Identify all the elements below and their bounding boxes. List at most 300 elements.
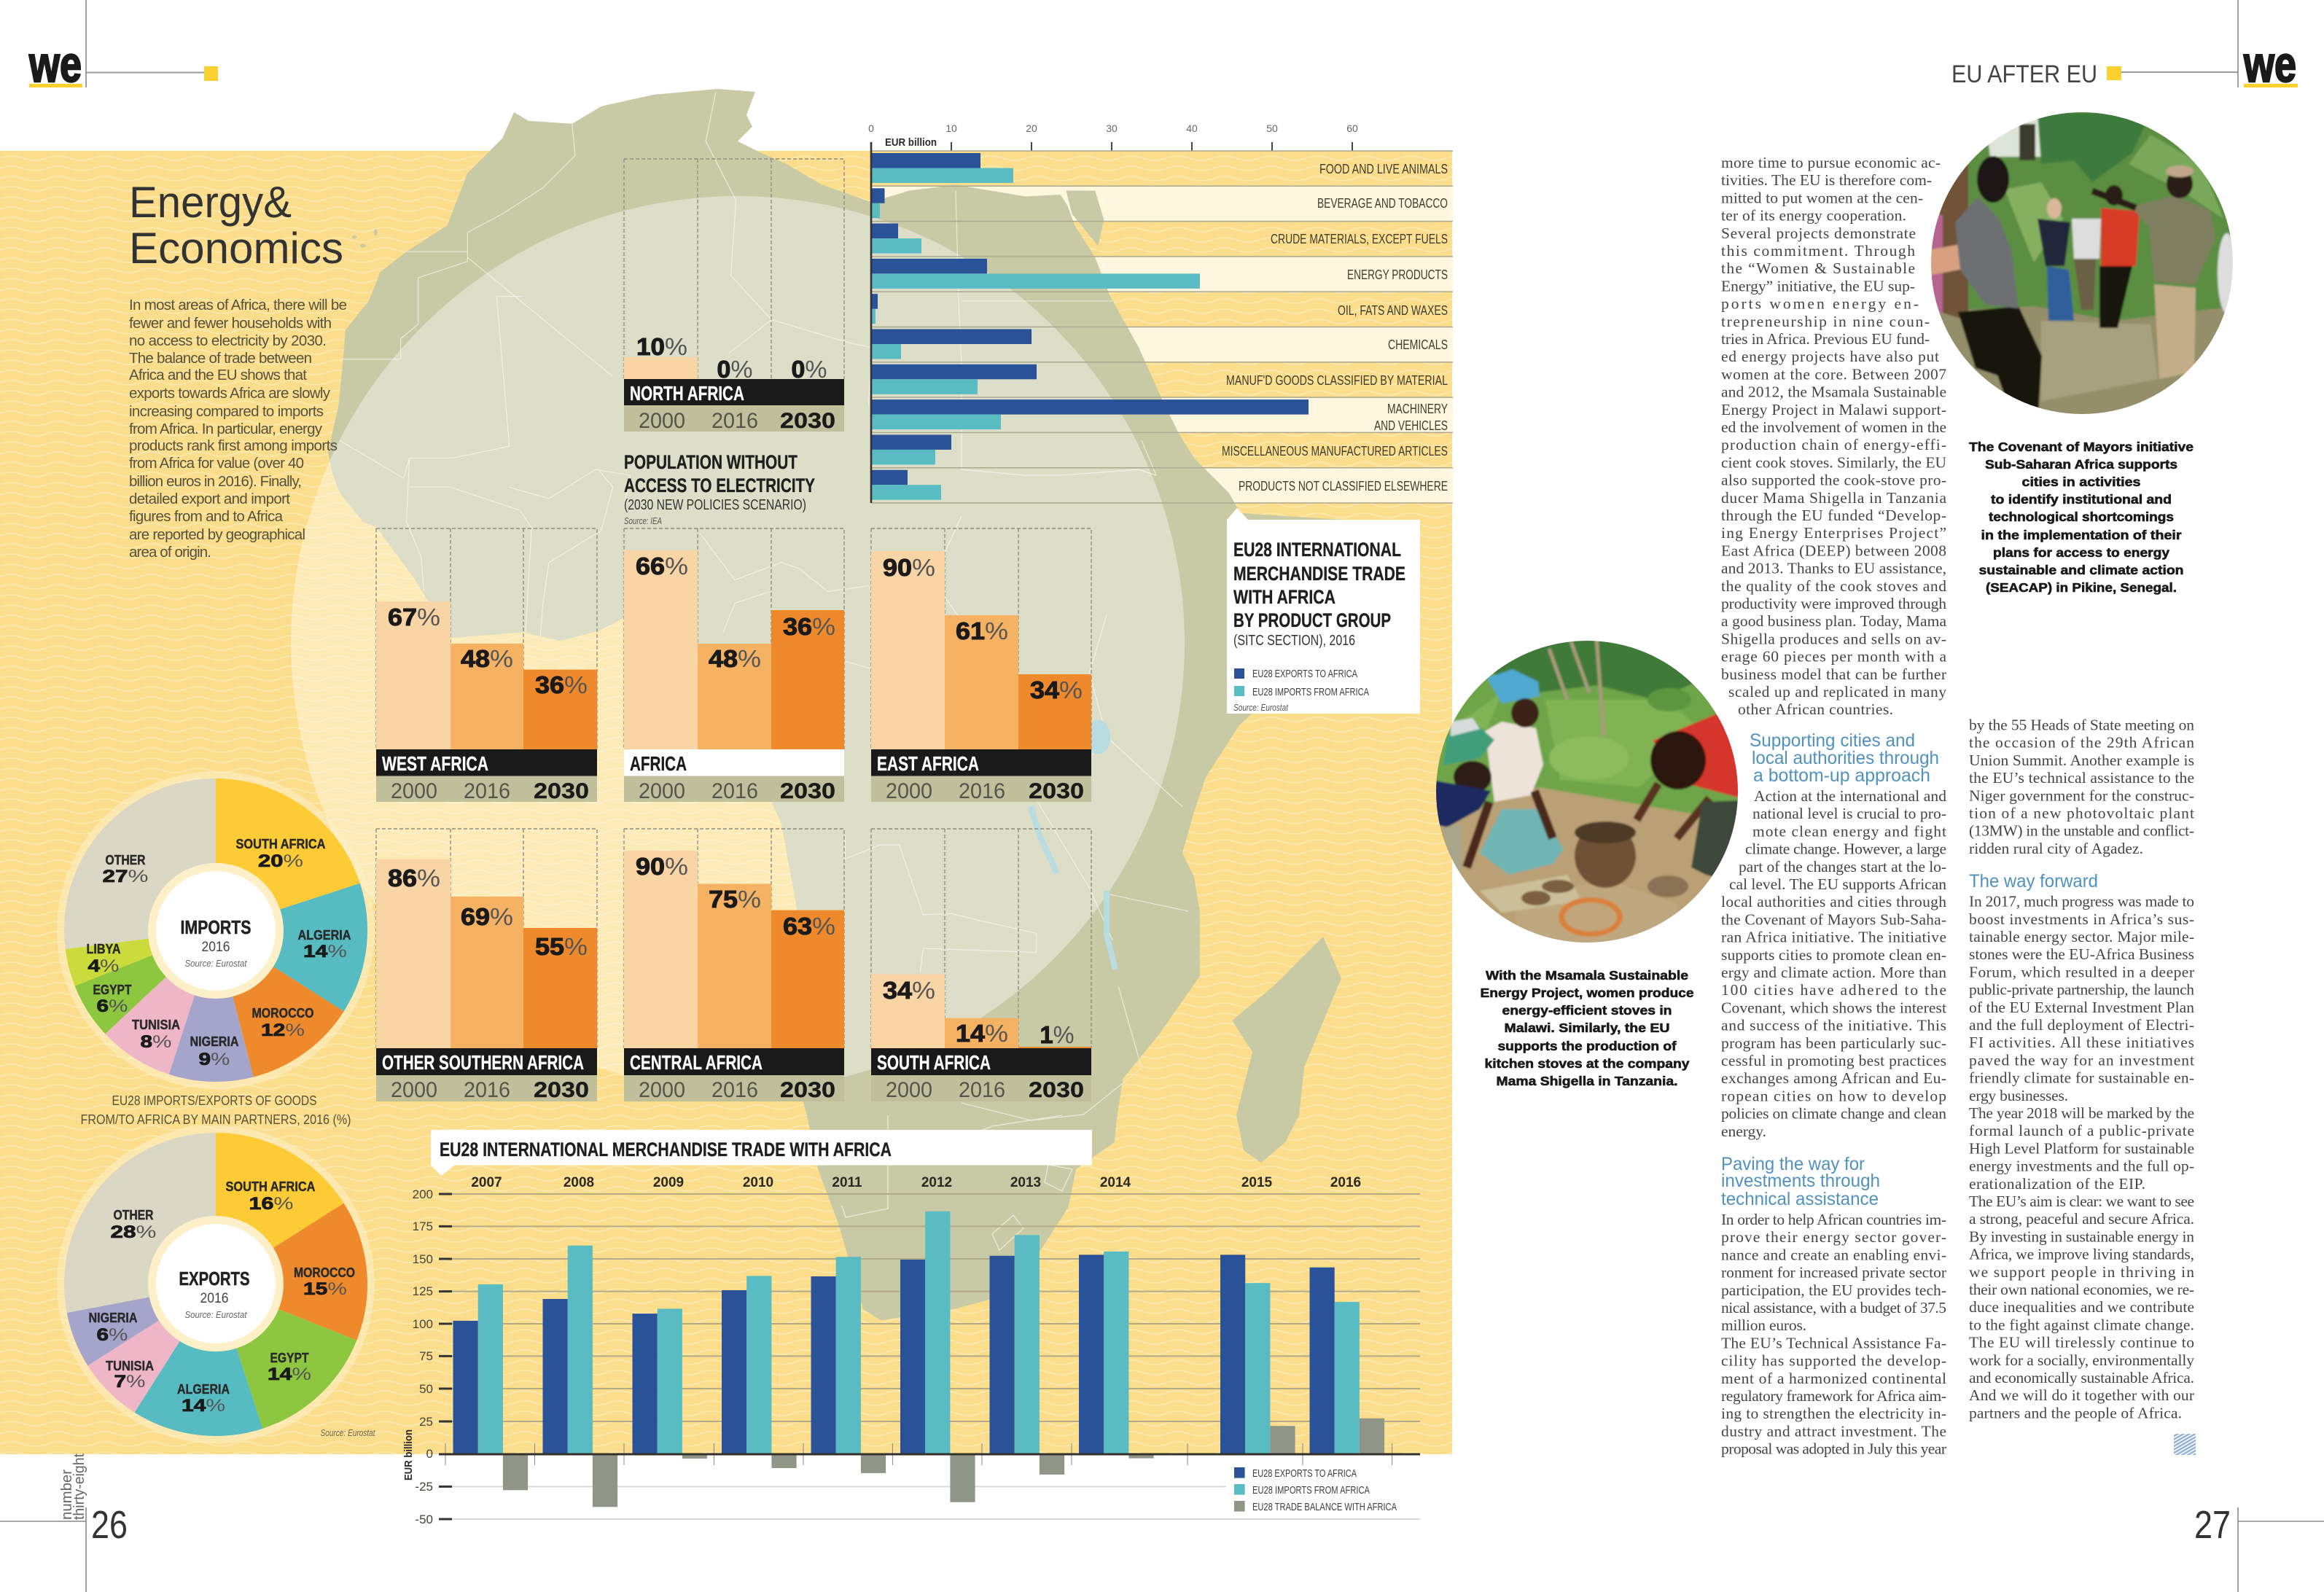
- chart: trade by product group: FOOD AND LIVE ANIMALS: [1319, 162, 1448, 176]
- panel: west africa: [376, 528, 597, 803]
- chart: trade by product group: BEVERAGE AND TOBACCO: [1317, 196, 1448, 211]
- title: Energy&: [129, 178, 292, 227]
- article text: supporting cities: cal level. The EU supports African: [1729, 875, 1946, 893]
- caption: Covenant of Mayors: cities in activities: [2022, 475, 2141, 489]
- panel: other southern africa: 55%: [535, 933, 588, 960]
- article text: right column top: by the 55 Heads of State meeting on: [1969, 716, 2194, 733]
- chart: trade by year: [402, 1175, 1420, 1526]
- article text: opening column: this commitment. Through: [1721, 242, 1915, 260]
- article text: supporting cities: exchanges among African and Eu-: [1721, 1069, 1946, 1087]
- article text: opening column: a good business plan. Today, Mama: [1721, 612, 1946, 630]
- article text: supporting cities: climate change. However, a large: [1745, 840, 1946, 858]
- callout: trade by product group title and legend: EU28 INTERNATIONAL: [1233, 539, 1401, 561]
- panel: south africa: 2016: [959, 1078, 1005, 1102]
- panel: central africa: 90%: [636, 853, 688, 880]
- article text: the way forward: paved the way for an investment: [1969, 1051, 2194, 1069]
- article text: the way forward: their own national economies, we re-: [1969, 1281, 2194, 1298]
- panel: east africa: 90%: [883, 554, 935, 581]
- subheading: paving the way: [1721, 1154, 1880, 1209]
- callout: trade by product group title and legend: BY PRODUCT GROUP: [1233, 609, 1391, 631]
- panel: north africa: 2030: [780, 409, 835, 433]
- article text: opening column: and 2013. Thanks to EU assistance,: [1721, 560, 1946, 577]
- article text: the way forward: By investing in sustainable energy in: [1969, 1228, 2194, 1245]
- intro text: In most areas of Africa, there will be: [129, 297, 347, 313]
- pie chart: imports: 9%: [198, 1050, 230, 1069]
- intro text: no access to electricity by 2030.: [129, 332, 327, 349]
- panel: africa: 36%: [783, 613, 835, 640]
- article text: opening column: ed the involvement of women in the: [1721, 418, 1946, 436]
- footer left: page number 26: 26: [91, 1503, 128, 1547]
- chart: trade by year: 2008: [564, 1175, 594, 1190]
- chart: trade by year: 150: [413, 1252, 433, 1266]
- callout: trade by product group title and legend: MERCHANDISE TRADE: [1233, 563, 1405, 585]
- article text: right column top: Union Summit. Another example is: [1969, 752, 2194, 769]
- article text: right column top: the EU’s technical assistance to the: [1969, 769, 2194, 787]
- panel: central africa: 2030: [780, 1078, 835, 1102]
- article text: the way forward: and economically sustainable Africa.: [1969, 1369, 2194, 1386]
- article text: supporting cities: Covenant, which shows the interest: [1721, 999, 1946, 1016]
- pie chart: exports: ALGERIA: [177, 1382, 230, 1397]
- article text: opening column: tries in Africa. Previous EU fund-: [1721, 330, 1930, 348]
- intro text: Africa and the EU shows that: [129, 367, 307, 383]
- panel: west africa: 2016: [464, 779, 510, 803]
- heading: population without access to electricity: Source: IEA: [624, 515, 662, 526]
- article text: opening column: scaled up and replicated in many: [1728, 683, 1946, 701]
- pie chart: exports: OTHER: [114, 1208, 154, 1222]
- pie chart: exports: 16 %: [249, 1194, 293, 1214]
- photo: women making stoves: [1432, 638, 1744, 948]
- article text: opening column: business model that can be further: [1721, 666, 1946, 683]
- light circle overlay: [291, 196, 1185, 1090]
- panel: north africa: 2016: [711, 409, 758, 433]
- article text: the way forward: The year 2018 will be marked by the: [1969, 1104, 2194, 1122]
- chart: trade by product group: 10: [945, 122, 957, 134]
- panel: south africa: SOUTH AFRICA: [877, 1051, 991, 1074]
- footer left: page number 26: [0, 1454, 128, 1592]
- article text: supporting cities: part of the changes start at the lo-: [1739, 858, 1946, 875]
- chart: trade by product group: EUR billion: [885, 136, 937, 149]
- lakes: [1031, 720, 1115, 969]
- article text: opening column: East Africa (DEEP) between 2008: [1721, 542, 1946, 559]
- article text: opening column: Several projects demonstrate: [1721, 225, 1916, 242]
- article text: opening column: cient cook stoves. Similarly, the EU: [1721, 453, 1946, 471]
- heading: population without access to electricity: [624, 451, 815, 526]
- chart: trade by year: 2012: [921, 1175, 952, 1190]
- article text: the way forward: erationalization of the EIP.: [1969, 1175, 2145, 1193]
- pie chart: imports: IMPORTS: [181, 916, 251, 938]
- pie chart: exports: 15 %: [303, 1279, 347, 1299]
- caption: Covenant of Mayors: technological shortcomings: [1989, 510, 2174, 524]
- panel: south africa: 34%: [883, 977, 935, 1004]
- caption: Covenant of Mayors: The Covenant of Mayors initiative: [1969, 440, 2194, 454]
- pie chart: exports: 14 %: [268, 1365, 311, 1384]
- article text: supporting cities: cessful in promoting best practices: [1721, 1052, 1946, 1069]
- article text: opening column: mitted to put women at the cen-: [1721, 189, 1923, 206]
- subheading: the way forward: The way forward: [1969, 871, 2098, 891]
- intro text: from Africa for value (over 40: [129, 455, 304, 472]
- article text: right column top: [1969, 716, 2194, 857]
- intro text: detailed export and import: [129, 491, 290, 507]
- article text: supporting cities: program has been particularly suc-: [1721, 1034, 1946, 1052]
- article text: paving the way: nical assistance, with a budget of 37.5: [1721, 1299, 1946, 1316]
- article text: the way forward: energy investments and the full op-: [1969, 1158, 2194, 1175]
- panel: central africa: 2016: [711, 1078, 758, 1102]
- article text: opening column: Energy Project in Malawi support-: [1721, 401, 1946, 418]
- chart: trade by product group: 30: [1106, 122, 1118, 134]
- panel: south africa: 1%: [1040, 1021, 1075, 1048]
- heading: EU28 international merchandise trade with Africa: EU28 INTERNATIONAL MERCHANDISE TRADE WITH AFRICA: [440, 1139, 892, 1160]
- legend: trade by year: EU28 EXPORTS TO AFRICA: [1252, 1467, 1357, 1480]
- panel: other southern africa: 2030: [534, 1078, 589, 1102]
- panel: other southern africa: 2016: [464, 1078, 510, 1102]
- chart: trade by year: 200: [413, 1187, 433, 1201]
- article text: the way forward: Forum, which resulted in a deeper: [1969, 963, 2194, 980]
- article text: the way forward: The EU’s aim is clear: we want to see: [1969, 1193, 2194, 1210]
- article text: paving the way: million euros.: [1721, 1316, 1806, 1334]
- chart: trade by year: 50: [419, 1382, 433, 1396]
- article text: paving the way: regulatory framework for Africa aim-: [1721, 1387, 1946, 1405]
- pie chart: imports: 12 %: [261, 1021, 305, 1040]
- chart: trade by year: 175: [413, 1220, 433, 1233]
- caption: women stoves: energy-efficient stoves in: [1502, 1003, 1672, 1018]
- title: [129, 178, 343, 273]
- article text: the way forward: work for a socially, environmentally: [1969, 1351, 2194, 1369]
- yellow wave background panel: [0, 151, 1453, 1454]
- chart: trade by product group: CHEMICALS: [1388, 337, 1448, 352]
- pie chart: imports: 14 %: [303, 942, 347, 961]
- article text: right column top: Niger government for the construc-: [1969, 787, 2194, 804]
- pie chart: imports: NIGERIA: [190, 1034, 239, 1049]
- article text: right column top: ridden rural city of Agadez.: [1969, 840, 2143, 857]
- article text: the way forward: stones were the EU-Africa Business: [1969, 945, 2194, 963]
- subheading: paving the way: Paving the way for: [1721, 1154, 1865, 1174]
- panel: west africa: 2030: [534, 779, 589, 803]
- panel: other southern africa: 69%: [461, 903, 513, 930]
- chart: trade by product group: AND VEHICLES: [1374, 418, 1448, 433]
- panel: central africa: CENTRAL AFRICA: [630, 1051, 763, 1074]
- article text: opening column: productivity were improved through: [1721, 595, 1946, 612]
- article text: supporting cities: ergy and climate action. More than: [1721, 964, 1946, 981]
- article text: right column top: (13MW) in the unstable and conflict-: [1969, 822, 2194, 840]
- article text: the way forward: and the full deployment of Electri-: [1969, 1016, 2194, 1034]
- intro text: products rank first among imports: [129, 437, 338, 454]
- article text: supporting cities: Action at the international and: [1754, 787, 1946, 805]
- pie chart: exports: 2016: [200, 1291, 229, 1306]
- intro text: from Africa. In particular, energy: [129, 421, 323, 437]
- heading: population without access to electricity: ACCESS TO ELECTRICITY: [624, 475, 815, 496]
- chart: trade by product group: 0: [868, 122, 874, 134]
- pie charts caption: [80, 1093, 351, 1127]
- panel: north africa: 2000: [639, 409, 685, 433]
- panel: east africa: 2016: [959, 779, 1005, 803]
- pie chart: exports: EGYPT: [270, 1351, 309, 1365]
- callout: trade by product group title and legend: EU28 IMPORTS FROM AFRICA: [1252, 686, 1369, 698]
- logo: we left: we: [28, 36, 82, 93]
- panel: other southern africa: 86%: [388, 865, 440, 891]
- article text: the way forward: The EU will tirelessly continue to: [1969, 1334, 2194, 1351]
- chart: trade by year: 100: [413, 1317, 433, 1331]
- chart: trade by product group: MANUF'D GOODS CLASSIFIED BY MATERIAL: [1226, 373, 1448, 388]
- panel: other southern africa: [376, 829, 597, 1102]
- pie chart: imports: SOUTH AFRICA: [236, 837, 325, 851]
- chart: trade by year: 2007: [471, 1175, 502, 1190]
- panel: central africa: 75%: [709, 886, 761, 913]
- caption: women stoves: Mama Shigella in Tanzania.: [1496, 1074, 1678, 1088]
- intro text: figures from and to Africa: [129, 508, 284, 525]
- logo: we right: we: [2243, 36, 2296, 93]
- article text: supporting cities: energy.: [1721, 1123, 1766, 1140]
- panel: east africa: EAST AFRICA: [877, 752, 979, 775]
- article text: the way forward: duce inequalities and we contribute: [1969, 1298, 2194, 1316]
- header rule left: [86, 0, 218, 87]
- footer left: page number 26: number: [59, 1470, 75, 1520]
- panel: africa: 2000: [639, 779, 685, 803]
- pie chart: imports: [57, 771, 375, 1089]
- panel: africa: AFRICA: [630, 752, 687, 775]
- chart: trade by product group: [868, 122, 1453, 503]
- caption: women stoves: Malawi. Similarly, the EU: [1505, 1021, 1669, 1035]
- article text: paving the way: nance and create an enabling envi-: [1721, 1246, 1946, 1263]
- panel: africa: 2030: [780, 779, 835, 803]
- intro text: exports towards Africa are slowly: [129, 385, 331, 402]
- chart: trade by product group: 60: [1346, 122, 1358, 134]
- article text: right column top: the occasion of the 29th African: [1969, 734, 2194, 752]
- article text: opening column: also supported the cook-stove pro-: [1721, 472, 1946, 489]
- panel: north africa: 0%: [717, 356, 752, 383]
- caption: women stoves: supports the production of: [1497, 1039, 1677, 1053]
- intro text: fewer and fewer households with: [129, 315, 332, 332]
- article text: opening column: the “Women & Sustainable: [1721, 260, 1915, 277]
- panel: east africa: 2000: [886, 779, 932, 803]
- chart: trade by year: -50: [415, 1513, 433, 1526]
- article text: the way forward: High Level Platform for sustainable: [1969, 1139, 2194, 1157]
- chart: trade by product group: 40: [1186, 122, 1198, 134]
- map of Africa: [328, 89, 1374, 1320]
- article text: paving the way: ing to strengthen the electricity in-: [1721, 1405, 1946, 1422]
- caption: women stoves: kitchen stoves at the company: [1484, 1056, 1690, 1071]
- article text: opening column: the quality of the cook stoves and: [1721, 577, 1946, 595]
- subheading: supporting cities: local authorities through: [1752, 748, 1939, 768]
- chart: trade by year: 2011: [832, 1175, 862, 1190]
- pie chart: exports: Source: Eurostat: [185, 1309, 248, 1320]
- pie charts caption: EU28 IMPORTS/EXPORTS OF GOODS: [112, 1093, 316, 1108]
- caption: women stoves: With the Msamala Sustainable: [1486, 968, 1688, 983]
- panel: north africa: NORTH AFRICA: [630, 382, 744, 405]
- article text: opening column: production chain of energy-effi-: [1721, 436, 1946, 453]
- article text: paving the way: The EU’s Technical Assistance Fa-: [1721, 1334, 1946, 1351]
- article text: paving the way: proposal was adopted in July this year: [1721, 1440, 1946, 1458]
- article text: opening column: Energy” initiative, the EU sup-: [1721, 277, 1915, 294]
- pie chart: imports: 27 %: [102, 867, 149, 886]
- article text: right column top: tion of a new photovoltaic plant: [1969, 805, 2194, 822]
- article text: supporting cities: supports cities to promote clean en-: [1721, 946, 1946, 964]
- pie chart: imports: 6%: [96, 996, 128, 1016]
- footer right: page number 27: [2194, 1503, 2324, 1592]
- callout: trade by product group title and legend: Source: Eurostat: [1233, 702, 1289, 713]
- panel: east africa: 2030: [1029, 779, 1084, 803]
- article text: paving the way: ronment for increased private sector: [1721, 1264, 1946, 1281]
- chart: trade by year: 2010: [743, 1175, 773, 1190]
- panel: south africa: [871, 829, 1091, 1102]
- chart: trade by year: 125: [413, 1284, 433, 1298]
- heading: EU28 international merchandise trade with Africa: [431, 1130, 1092, 1176]
- panel: west africa: 36%: [535, 671, 588, 698]
- chart: trade by year: 2014: [1100, 1175, 1131, 1190]
- article text: supporting cities: local authorities and cities through: [1721, 893, 1946, 910]
- subheading: paving the way: technical assistance: [1721, 1189, 1879, 1209]
- article text: paving the way: [1721, 1211, 1946, 1458]
- article text: the way forward: of the EU External Investment Plan: [1969, 999, 2194, 1016]
- chart: trade by year: 2016: [1330, 1175, 1361, 1190]
- intro text: area of origin.: [129, 544, 211, 561]
- pie chart: imports: 8%: [140, 1032, 172, 1052]
- panel: central africa: [624, 829, 844, 1102]
- panel: east africa: [871, 528, 1091, 803]
- pie chart: exports: SOUTH AFRICA: [226, 1179, 315, 1194]
- panel: central africa: 63%: [783, 913, 835, 940]
- chart: trade by year: EUR billion: [402, 1429, 415, 1480]
- intro text: are reported by geographical: [129, 526, 305, 543]
- article text: opening column: ports women energy en-: [1721, 295, 1919, 313]
- pie chart: imports: LIBYA: [86, 942, 121, 956]
- caption: Covenant of Mayors: sustainable and climate action: [1978, 563, 2184, 577]
- chart: trade by year: 0: [426, 1447, 433, 1461]
- article text: paving the way: dustry and attract investment. The: [1721, 1422, 1946, 1440]
- article text: the way forward: ergy businesses.: [1969, 1087, 2068, 1104]
- pie chart: exports: 14 %: [182, 1396, 225, 1416]
- panel: north africa: [624, 159, 844, 433]
- article text: the way forward: partners and the people of Africa.: [1969, 1404, 2182, 1421]
- article text: paving the way: cility has supported the develop-: [1721, 1352, 1946, 1370]
- article text: supporting cities: ropean cities on how to develop: [1721, 1087, 1946, 1104]
- caption: women stoves: Energy Project, women produce: [1480, 986, 1694, 1000]
- panel: north africa: 10%: [636, 333, 687, 360]
- chart: trade by product group: ENERGY PRODUCTS: [1347, 268, 1448, 282]
- pie chart: exports: EXPORTS: [179, 1268, 249, 1289]
- pie chart: exports: [57, 1125, 375, 1443]
- article text: opening column: erage 60 pieces per month with a: [1721, 648, 1946, 666]
- chart: trade by year: 2015: [1241, 1175, 1273, 1190]
- panel: south africa: 2000: [886, 1078, 932, 1102]
- pie chart: imports: 20 %: [258, 851, 303, 871]
- article text: opening column: trepreneurship in nine coun-: [1721, 313, 1930, 330]
- callout: trade by product group title and legend: WITH AFRICA: [1233, 586, 1335, 608]
- chart: trade by product group: OIL, FATS AND WAXES: [1338, 303, 1448, 318]
- panel: west africa: 67%: [388, 604, 440, 631]
- chart: trade by year: -25: [415, 1480, 433, 1494]
- pie chart: imports: EGYPT: [93, 983, 132, 997]
- panel: north africa: 0%: [792, 356, 827, 383]
- article text: the way forward: In 2017, much progress was made to: [1969, 893, 2194, 910]
- article text: supporting cities: mote clean energy and fight: [1752, 822, 1946, 840]
- panel: south africa: 14%: [956, 1020, 1008, 1047]
- pie chart: imports: 4%: [87, 956, 120, 976]
- panel: other southern africa: OTHER SOUTHERN AFRICA: [382, 1051, 584, 1074]
- callout: trade by product group title and legend: EU28 EXPORTS TO AFRICA: [1252, 668, 1357, 680]
- article text: supporting cities: 100 cities have adhered to the: [1721, 981, 1946, 999]
- article text: opening column: [1721, 154, 1946, 718]
- panel: other southern africa: 2000: [391, 1078, 437, 1102]
- source note: Source: Eurostat: [321, 1427, 376, 1438]
- callout: trade by product group title and legend: (SITC SECTION), 2016: [1233, 633, 1355, 649]
- article text: opening column: women at the core. Between 2007: [1721, 365, 1946, 383]
- caption: Covenant of Mayors: (SEACAP) in Pikine, Senegal.: [1986, 580, 2177, 595]
- article text: supporting cities: policies on climate change and clean: [1721, 1105, 1946, 1123]
- intro text: The balance of trade between: [129, 350, 312, 367]
- panel: west africa: 2000: [391, 779, 437, 803]
- panel: africa: 2016: [711, 779, 758, 803]
- photo: Covenant of Mayors group: [1928, 109, 2238, 419]
- callout: trade by product group title and legend: [1227, 508, 1420, 714]
- article text: opening column: tivities. The EU is therefore com-: [1721, 171, 1932, 189]
- chart: trade by year: 75: [419, 1349, 433, 1363]
- article text: paving the way: participation, the EU provides tech-: [1721, 1281, 1946, 1299]
- caption: Covenant of Mayors: [1969, 440, 2194, 595]
- pie chart: exports: 7%: [114, 1372, 146, 1392]
- article text: the way forward: boost investments in Africa’s sus-: [1969, 910, 2194, 928]
- article text: opening column: ducer Mama Shigella in Tanzania: [1721, 489, 1946, 507]
- footer left: page number 26: thirty-eight: [71, 1454, 87, 1520]
- article text: opening column: through the EU funded “Develop-: [1721, 507, 1946, 524]
- article text: opening column: other African countries.: [1738, 701, 1893, 718]
- pie chart: exports: MOROCCO: [294, 1265, 355, 1280]
- article text: the way forward: we support people in thriving in: [1969, 1263, 2194, 1281]
- chart: trade by product group: CRUDE MATERIALS, EXCEPT FUELS: [1271, 232, 1448, 246]
- article text: supporting cities: ran Africa initiative. The initiative: [1721, 929, 1946, 946]
- article text: the way forward: friendly climate for sustainable en-: [1969, 1069, 2194, 1087]
- pie chart: imports: Source: Eurostat: [185, 958, 248, 969]
- article text: paving the way: ment of a harmonized continental: [1721, 1370, 1946, 1387]
- chart: trade by product group: 20: [1026, 122, 1037, 134]
- panel: east africa: 34%: [1030, 676, 1083, 703]
- panel: africa: 48%: [709, 645, 761, 672]
- article text: supporting cities: [1721, 787, 1946, 1140]
- legend: trade by year: EU28 TRADE BALANCE WITH AFRICA: [1252, 1501, 1397, 1513]
- pie charts caption: FROM/TO AFRICA BY MAIN PARTNERS, 2016 (%): [80, 1112, 351, 1127]
- article text: opening column: ing Energy Enterprises Project”: [1721, 524, 1946, 542]
- chart: trade by product group: PRODUCTS NOT CLASSIFIED ELSEWHERE: [1239, 479, 1448, 493]
- article text: opening column: Shigella produces and sells on av-: [1721, 630, 1946, 647]
- panel: africa: 66%: [636, 553, 688, 580]
- pie chart: exports: 28 %: [111, 1222, 156, 1242]
- pie chart: exports: 6%: [96, 1325, 128, 1345]
- article text: the way forward: [1969, 893, 2194, 1421]
- heading: population without access to electricity: (2030 NEW POLICIES SCENARIO): [624, 497, 806, 513]
- pie chart: imports: MOROCCO: [252, 1006, 313, 1021]
- article text: the way forward: formal launch of a public-private: [1969, 1122, 2194, 1139]
- pie chart: imports: ALGERIA: [297, 928, 351, 943]
- article text: the way forward: FI activities. All these initiatives: [1969, 1034, 2194, 1051]
- article text: supporting cities: and success of the initiative. This: [1721, 1017, 1946, 1034]
- chart: trade by product group: MACHINERY: [1387, 402, 1448, 416]
- article text: the way forward: tainable energy sector. Major mile-: [1969, 928, 2194, 945]
- legend: trade by year: EU28 IMPORTS FROM AFRICA: [1252, 1484, 1370, 1497]
- article text: supporting cities: national level is crucial to pro-: [1752, 805, 1946, 822]
- header right: EU AFTER EU: [1951, 0, 2238, 88]
- pie chart: imports: TUNISIA: [132, 1018, 180, 1032]
- heading: population without access to electricity: POPULATION WITHOUT: [624, 451, 798, 473]
- chart: trade by product group: 50: [1266, 122, 1278, 134]
- chart: trade by year: 25: [419, 1415, 433, 1429]
- intro text: billion euros in 2016). Finally,: [129, 473, 302, 490]
- intro text: increasing compared to imports: [129, 403, 324, 420]
- article text: opening column: more time to pursue economic ac-: [1721, 154, 1941, 171]
- pie chart: imports: 2016: [201, 940, 230, 955]
- article text: the way forward: a strong, peaceful and secure Africa.: [1969, 1210, 2194, 1228]
- panel: south africa: 2030: [1029, 1078, 1084, 1102]
- subheading: supporting cities: a bottom-up approach: [1753, 765, 1930, 786]
- caption: Covenant of Mayors: to identify institutional and: [1991, 492, 2172, 507]
